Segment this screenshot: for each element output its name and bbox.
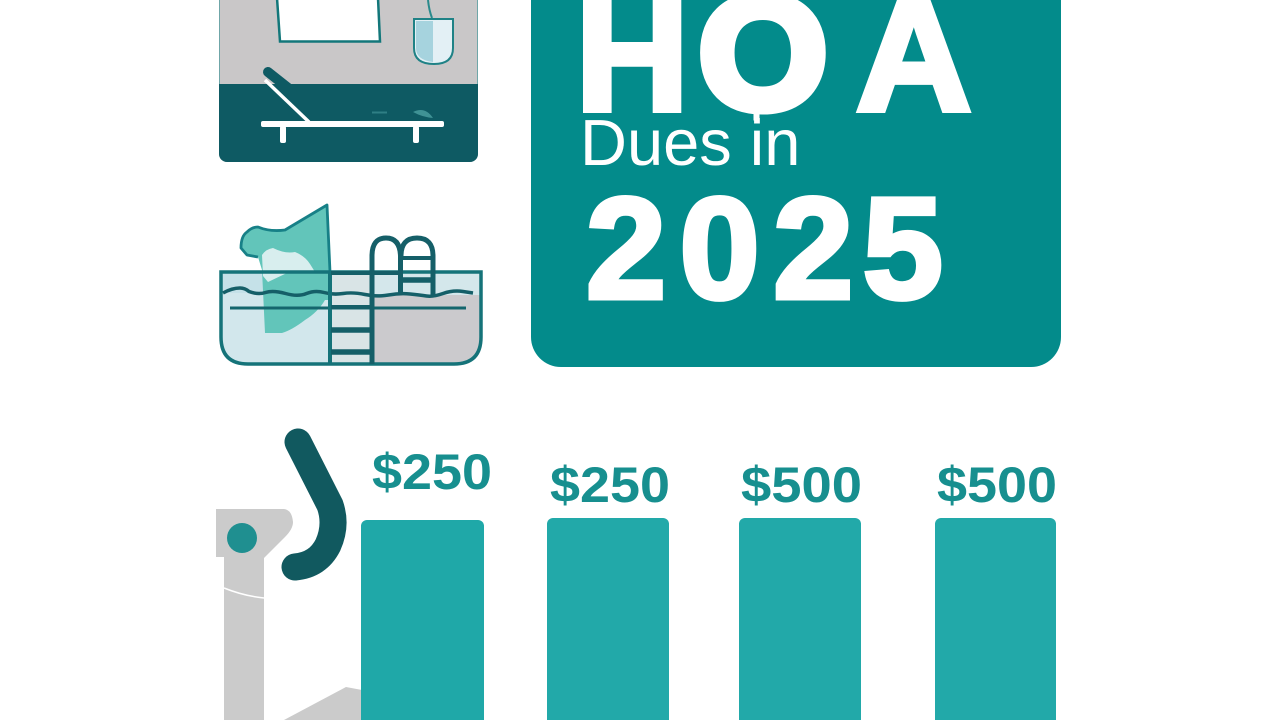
heading: HOA [576, 0, 972, 144]
icon: swimming pool with ladder [221, 205, 481, 364]
icon: room with lounge chair [219, 0, 478, 162]
bar 2 with value [547, 457, 670, 720]
bar 4 with value [935, 457, 1057, 720]
bar chart [361, 444, 1057, 720]
bar 1 with value: $250 [372, 444, 492, 500]
bar 4 with value: $500 [937, 457, 1057, 513]
bar 1 with value [361, 444, 492, 720]
bar 3 with value: $500 [741, 457, 862, 513]
icon: pool skimmer pole [216, 442, 362, 720]
heading: 2025: 2025 [586, 168, 956, 329]
panel: title block [531, 0, 1061, 367]
subheading: Dues in: Dues in [580, 106, 800, 179]
bar 3 with value [739, 457, 862, 720]
bar 2 with value: $250 [550, 457, 670, 513]
